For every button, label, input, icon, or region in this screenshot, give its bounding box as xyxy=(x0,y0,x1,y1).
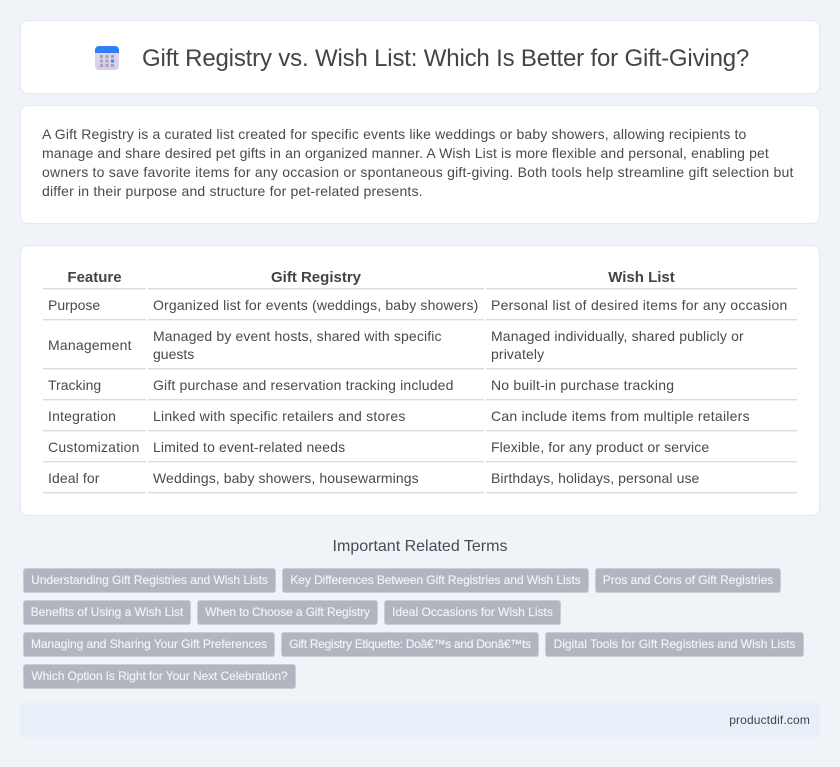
related terms tags: Gift Registry Etiquette: Doâ€™s and Donâ€™ts xyxy=(289,637,531,651)
related terms tags xyxy=(23,568,804,689)
intro paragraph: manage and share desired pet gifts in an organized manner. A Wish List is more flexible and personal, enabling pet xyxy=(42,145,769,161)
row: management: privately xyxy=(491,346,544,362)
panel: header xyxy=(20,20,820,94)
intro paragraph: differ in their purpose and structure for pet-related presents. xyxy=(42,183,423,199)
row: customization: Flexible, for any product or service xyxy=(491,439,709,455)
intro paragraph: owners to save favorite items for any occasion or spontaneous gift-giving. Both tools help streamline gift selection but xyxy=(42,164,794,180)
title: Gift Registry vs. Wish List: Which Is Better for Gift-Giving? xyxy=(142,45,749,72)
icon: calendar xyxy=(95,46,119,70)
related terms tags: Benefits of Using a Wish List xyxy=(31,605,183,619)
related terms tags: Which Option Is Right for Your Next Celebration? xyxy=(31,669,288,683)
row: purpose: Organized list for events (weddings, baby showers) xyxy=(153,297,478,313)
row: management: guests xyxy=(153,346,194,362)
row: ideal for: Ideal for xyxy=(48,470,100,486)
table header xyxy=(67,269,675,286)
row: integration: Integration xyxy=(48,408,116,424)
related terms tags: When to Choose a Gift Registry xyxy=(205,605,370,619)
row: tracking: No built-in purchase tracking xyxy=(491,377,674,393)
row: ideal for: Weddings, baby showers, housewarmings xyxy=(153,470,419,486)
intro paragraph xyxy=(42,126,794,199)
row: purpose: Purpose xyxy=(48,297,100,313)
related terms tags: Key Differences Between Gift Registries and Wish Lists xyxy=(290,573,581,587)
row: tracking: Gift purchase and reservation tracking included xyxy=(153,377,454,393)
table header: Gift Registry xyxy=(271,269,361,286)
row: purpose xyxy=(48,297,788,313)
row: management xyxy=(48,328,744,362)
row: management: Managed individually, shared publicly or xyxy=(491,328,744,344)
table header: Feature xyxy=(67,269,122,286)
row: purpose: Personal list of desired items for any occasion xyxy=(491,297,788,313)
row: management: Managed by event hosts, shared with specific xyxy=(153,328,442,344)
row: customization: Customization xyxy=(48,439,140,455)
row: tracking xyxy=(48,377,674,393)
row: integration xyxy=(48,408,750,424)
related terms tags: Digital Tools for Gift Registries and Wish Lists xyxy=(554,637,795,651)
row: integration: Linked with specific retailers and stores xyxy=(153,408,406,424)
related terms tags: Understanding Gift Registries and Wish Lists xyxy=(31,573,268,587)
row: customization: Limited to event-related needs xyxy=(153,439,345,455)
footer source: productdif.com xyxy=(729,713,810,727)
table header: Wish List xyxy=(608,269,675,286)
related terms tags: Ideal Occasions for Wish Lists xyxy=(392,605,553,619)
panel: comparison table xyxy=(20,245,820,516)
row: tracking: Tracking xyxy=(48,377,101,393)
intro paragraph: A Gift Registry is a curated list created for specific events like weddings or baby showers, allowing recipients to xyxy=(42,126,747,142)
row: management: Management xyxy=(48,337,132,353)
panel: introduction text xyxy=(20,105,820,224)
row: ideal for: Birthdays, holidays, personal use xyxy=(491,470,699,486)
footer xyxy=(20,703,820,737)
related terms tags: Pros and Cons of Gift Registries xyxy=(603,573,773,587)
row: integration: Can include items from multiple retailers xyxy=(491,408,750,424)
heading: related terms: Important Related Terms xyxy=(333,538,507,555)
related terms tags: Managing and Sharing Your Gift Preferences xyxy=(31,637,267,651)
row: ideal for xyxy=(48,470,699,486)
row: customization xyxy=(48,439,709,455)
